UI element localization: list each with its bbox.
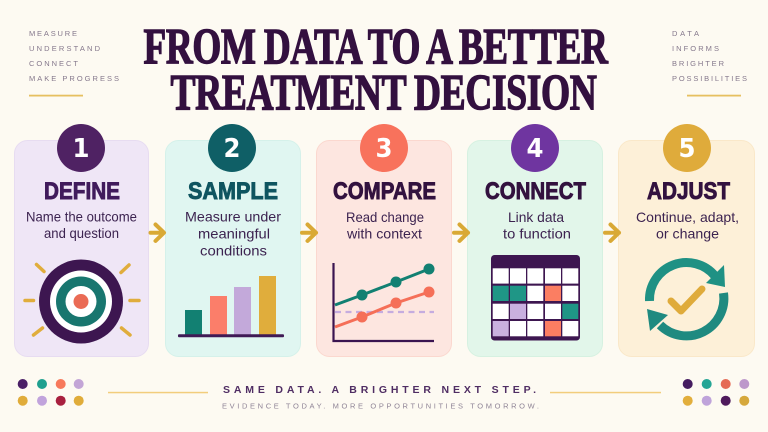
- panel: step 2 sample: conditions: [200, 242, 267, 258]
- panel: step 3 compare: [316, 124, 452, 356]
- panel: step 5 adjust: or change: [656, 226, 719, 242]
- panel: step 1 define: and question: [44, 225, 119, 241]
- right side note: DATA: [672, 29, 699, 38]
- panel: step 2 sample: Measure under: [185, 208, 281, 224]
- left side note: UNDERSTAND: [29, 44, 101, 53]
- panel: step 1 define: 1: [72, 134, 90, 164]
- panel: step 5 adjust: [618, 124, 754, 356]
- calendar grid: [491, 255, 580, 340]
- panel: step 3 compare: COMPARE: [333, 178, 436, 205]
- icon: cycle with check: [647, 263, 725, 336]
- panel: step 5 adjust: 5: [678, 134, 696, 164]
- left side note: MEASURE: [29, 29, 77, 38]
- left side note: MAKE PROGRESS: [29, 74, 119, 83]
- panel: step 4 connect: to function: [503, 226, 571, 242]
- footer text: [108, 384, 661, 411]
- left side note: CONNECT: [29, 59, 78, 68]
- footer dots left: [18, 379, 84, 406]
- arrow: step 1 to 2: [150, 224, 164, 241]
- footer text: SAME DATA. A BRIGHTER NEXT STEP.: [223, 384, 536, 396]
- panel: step 2 sample: SAMPLE: [188, 178, 278, 205]
- panel: step 4 connect: 4: [526, 134, 544, 164]
- panel: step 2 sample: meaningful: [198, 226, 270, 242]
- right side note: [672, 29, 747, 96]
- panel: step 5 adjust: ADJUST: [647, 178, 730, 205]
- panel: step 4 connect: [468, 124, 602, 356]
- panel: step 4 connect: CONNECT: [485, 178, 586, 205]
- title: FROM DATA TO A BETTER: [144, 20, 609, 76]
- right side note: INFORMS: [672, 44, 719, 53]
- panel: step 1 define: DEFINE: [44, 178, 120, 205]
- title: [144, 20, 609, 122]
- arrow: step 4 to 5: [605, 224, 619, 241]
- panel: step 5 adjust: Continue, adapt,: [636, 209, 739, 225]
- panel: step 3 compare: Read change: [346, 209, 424, 225]
- bar chart: [178, 276, 284, 337]
- panel: step 3 compare: with context: [346, 226, 422, 242]
- panel: step 1 define: [14, 124, 148, 356]
- icon: target: [25, 260, 139, 344]
- footer dots right: [683, 379, 749, 406]
- footer text: EVIDENCE TODAY. MORE OPPORTUNITIES TOMORROW.: [222, 402, 539, 411]
- panel: step 4 connect: Link data: [508, 209, 564, 225]
- right side note: POSSIBILITIES: [672, 74, 747, 83]
- title: TREATMENT DECISION: [170, 66, 597, 122]
- panel: step 1 define: Name the outcome: [26, 208, 137, 224]
- panel: step 2 sample: [166, 124, 300, 356]
- panel: step 3 compare: 3: [376, 134, 392, 164]
- left side note: [29, 29, 119, 96]
- arrow: step 2 to 3: [302, 224, 316, 241]
- panel: step 2 sample: 2: [224, 134, 240, 164]
- right side note: BRIGHTER: [672, 59, 725, 68]
- arrow: step 3 to 4: [454, 224, 468, 241]
- line chart: [334, 263, 434, 341]
